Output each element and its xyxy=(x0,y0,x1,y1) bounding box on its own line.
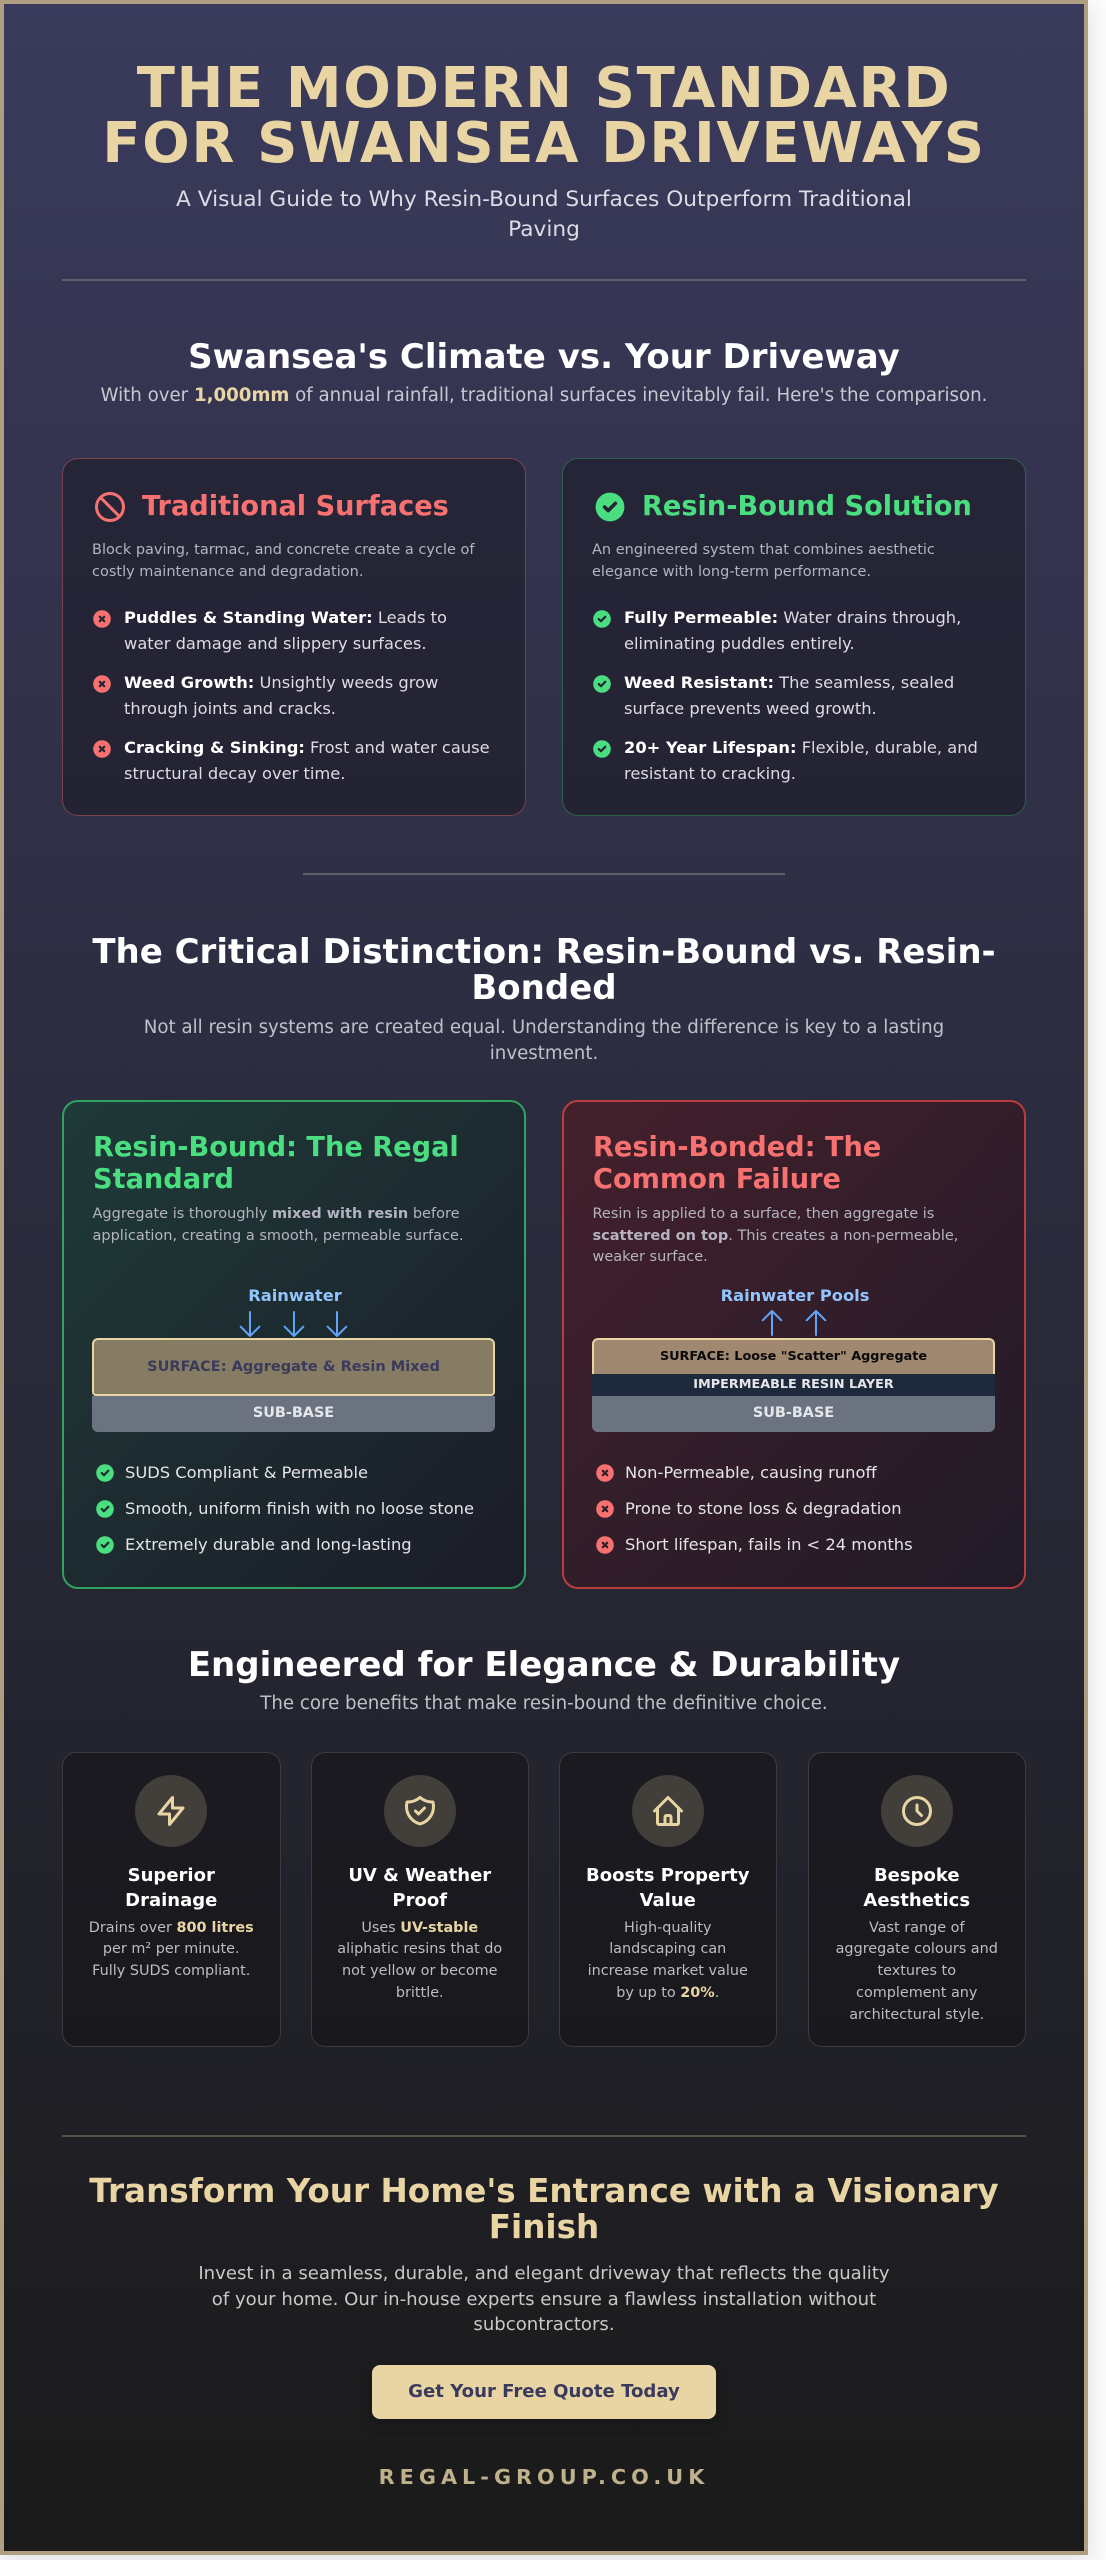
benefit card: drainage xyxy=(62,1752,280,2047)
list item xyxy=(624,608,961,653)
benefit text: brittle. xyxy=(396,1985,444,2001)
distinction intro text xyxy=(144,1016,944,1064)
list item: Fully Permeable: Water drains through, xyxy=(624,608,961,627)
list item xyxy=(124,608,447,653)
arrows: rain down xyxy=(240,1311,348,1337)
icon: check xyxy=(596,492,624,522)
benefit text xyxy=(337,1920,502,2001)
title: THE MODERN STANDARD xyxy=(137,56,951,121)
benefit title: Drainage xyxy=(125,1890,217,1911)
panel description: weaker surface. xyxy=(592,1249,708,1265)
call to action text: of your home. Our in-house experts ensure a flawless installation without xyxy=(212,2289,876,2310)
list item: Cracking & Sinking: Frost and water cause xyxy=(124,738,490,757)
heading: benefits: Engineered for Elegance & Durability xyxy=(188,1645,900,1685)
icon: check xyxy=(96,1464,114,1482)
subtitle xyxy=(176,187,912,242)
icon: check xyxy=(593,610,611,628)
layer: loose aggregate xyxy=(592,1338,995,1374)
benefit text: architectural style. xyxy=(849,2007,984,2023)
benefit title: Boosts Property xyxy=(586,1865,750,1886)
benefit title xyxy=(348,1865,492,1911)
layer: surface: SURFACE: Aggregate & Resin Mixed xyxy=(147,1358,440,1375)
layer: surface xyxy=(92,1338,495,1396)
call to action text xyxy=(0,2261,1088,2338)
panel description xyxy=(592,542,935,580)
icon: check xyxy=(96,1500,114,1518)
layer: sub-base xyxy=(92,1396,495,1432)
panel heading xyxy=(593,1132,881,1195)
list item: Short lifespan, fails in < 24 months xyxy=(625,1535,913,1554)
distinction intro text: investment. xyxy=(490,1042,598,1064)
button: free quote: Get Your Free Quote Today xyxy=(408,2381,680,2402)
list item: 20+ Year Lifespan: Flexible, durable, and xyxy=(624,738,978,757)
benefit text: textures to xyxy=(878,1963,956,1979)
rainwater label: Rainwater xyxy=(248,1286,342,1305)
benefit text: aggregate colours and xyxy=(836,1941,998,1957)
panel heading xyxy=(93,1132,459,1195)
panel description xyxy=(92,1206,464,1244)
climate intro text: With over 1,000mm of annual rainfall, traditional surfaces inevitably fail. Here's the comparison. xyxy=(101,385,987,406)
website: REGAL-GROUP.CO.UK xyxy=(379,2465,709,2489)
benefit text: per m² per minute. xyxy=(103,1941,240,1957)
panel heading: Standard xyxy=(93,1164,234,1195)
call to action heading: Transform Your Home's Entrance with a Visionary xyxy=(89,2172,999,2210)
button: free quote xyxy=(372,2365,716,2419)
benefits intro text: The core benefits that make resin-bound the definitive choice. xyxy=(260,1693,828,1714)
list item: surface prevents weed growth. xyxy=(624,699,877,718)
list item: structural decay over time. xyxy=(124,764,345,783)
heading: climate: Swansea's Climate vs. Your Driveway xyxy=(188,337,900,377)
panel description: An engineered system that combines aesthetic xyxy=(592,542,935,558)
list item: Weed Growth: Unsightly weeds grow xyxy=(124,673,438,692)
call to action text: subcontractors. xyxy=(473,2314,615,2335)
panel heading: Traditional Surfaces xyxy=(142,491,449,522)
layer: impermeable resin: IMPERMEABLE RESIN LAYER xyxy=(693,1377,894,1392)
list item: Extremely durable and long-lasting xyxy=(125,1535,412,1554)
icon: check xyxy=(593,675,611,693)
icon: ban xyxy=(95,492,125,522)
title xyxy=(102,56,986,176)
list item xyxy=(124,738,490,783)
benefit text: Vast range of xyxy=(869,1920,965,1936)
icon: x xyxy=(596,1536,614,1554)
benefit text: Uses UV-stable xyxy=(361,1920,478,1936)
list item xyxy=(124,673,438,718)
icon: check xyxy=(593,740,611,758)
benefit card: aesthetics xyxy=(808,1752,1026,2047)
heading: critical distinction: The Critical Distinction: Resin-Bound vs. Resin- xyxy=(92,932,996,972)
panel description: application, creating a smooth, permeable surface. xyxy=(92,1228,464,1244)
icon: bolt xyxy=(135,1775,207,1847)
panel: resin-bonded xyxy=(562,1100,1026,1589)
layer: loose aggregate: SURFACE: Loose "Scatter" Aggregate xyxy=(660,1349,927,1364)
panel heading: Resin-Bound Solution xyxy=(642,491,972,522)
list item: Prone to stone loss & degradation xyxy=(625,1499,902,1518)
list item: eliminating puddles entirely. xyxy=(624,634,855,653)
rainwater label: Rainwater Pools xyxy=(721,1286,869,1305)
panel description: Aggregate is thoroughly mixed with resin before xyxy=(92,1206,460,1222)
benefit title: Value xyxy=(640,1890,696,1911)
benefit card: value xyxy=(558,1752,777,2047)
layer: sub-base: SUB-BASE xyxy=(753,1405,834,1421)
benefit text xyxy=(560,1918,776,2005)
list item: Puddles & Standing Water: Leads to xyxy=(124,608,447,627)
icon: x xyxy=(596,1500,614,1518)
subtitle: A Visual Guide to Why Resin-Bound Surfaces Outperform Traditional xyxy=(176,187,912,212)
list item: through joints and cracks. xyxy=(124,699,336,718)
layer: sub-base: SUB-BASE xyxy=(253,1405,334,1421)
panel description: scattered on top. This creates a non-permeable, xyxy=(592,1228,958,1244)
benefit text: complement any xyxy=(856,1985,977,2001)
subtitle: Paving xyxy=(508,217,580,242)
benefit title: UV & Weather xyxy=(348,1865,491,1886)
panel description: elegance with long-term performance. xyxy=(592,564,871,580)
benefit title xyxy=(125,1865,217,1911)
benefit text: not yellow or become xyxy=(342,1963,498,1979)
benefit text: by up to 20%. xyxy=(616,1985,719,2001)
list item: Non-Permeable, causing runoff xyxy=(625,1463,877,1482)
list item: Smooth, uniform finish with no loose stone xyxy=(125,1499,474,1518)
panel description xyxy=(592,1206,958,1265)
benefit text: aliphatic resins that do xyxy=(337,1941,502,1957)
icon: x xyxy=(93,610,111,628)
icon: check xyxy=(96,1536,114,1554)
layer: impermeable resin xyxy=(592,1374,995,1396)
benefit text xyxy=(89,1920,254,1979)
list item xyxy=(624,738,978,783)
panel heading: Resin-Bonded: The xyxy=(593,1132,881,1163)
arrows: rain pooling up xyxy=(762,1310,826,1336)
call to action heading xyxy=(0,2173,1088,2245)
call to action heading: Finish xyxy=(489,2208,599,2246)
benefit title: Proof xyxy=(392,1890,447,1911)
benefit text: High-quality xyxy=(624,1920,712,1936)
panel heading: Resin-Bound: The Regal xyxy=(93,1132,459,1163)
benefit text: increase market value xyxy=(588,1963,748,1979)
benefit text: landscaping can xyxy=(609,1941,726,1957)
icon: x xyxy=(93,675,111,693)
benefit title: Superior xyxy=(128,1865,215,1886)
list item: water damage and slippery surfaces. xyxy=(124,634,427,653)
distinction intro text: Not all resin systems are created equal. Understanding the difference is key to a lasting xyxy=(144,1016,944,1038)
benefit title xyxy=(586,1865,750,1911)
list item: Weed Resistant: The seamless, sealed xyxy=(624,673,954,692)
panel heading: Common Failure xyxy=(593,1164,841,1195)
list item xyxy=(624,673,954,718)
benefit title: Bespoke xyxy=(874,1865,960,1886)
call to action text: Invest in a seamless, durable, and elegant driveway that reflects the quality xyxy=(198,2263,890,2284)
benefit title xyxy=(808,1863,1025,1913)
icon: shield xyxy=(384,1775,456,1847)
icon: clock xyxy=(881,1775,953,1847)
benefit text: Fully SUDS compliant. xyxy=(92,1963,250,1979)
feature list xyxy=(96,1463,474,1554)
icon: house xyxy=(632,1775,704,1847)
panel: resin-bound solution xyxy=(562,458,1026,816)
panel description: Resin is applied to a surface, then aggregate is xyxy=(592,1206,934,1222)
panel description: costly maintenance and degradation. xyxy=(92,564,363,580)
heading: critical distinction: Bonded xyxy=(471,968,617,1008)
icon: x xyxy=(596,1464,614,1482)
benefit card: uv xyxy=(310,1752,529,2047)
heading: critical distinction xyxy=(92,932,996,1008)
benefit text: Drains over 800 litres xyxy=(89,1920,254,1936)
benefit title: Aesthetics xyxy=(863,1890,970,1911)
icon: x xyxy=(93,740,111,758)
title: FOR SWANSEA DRIVEWAYS xyxy=(102,111,986,176)
list item: resistant to cracking. xyxy=(624,764,796,783)
list item: SUDS Compliant & Permeable xyxy=(125,1463,368,1482)
layer: sub-base xyxy=(592,1396,995,1432)
drawback list xyxy=(596,1463,913,1554)
benefit text xyxy=(808,1918,1025,2026)
panel description xyxy=(92,542,475,580)
panel: traditional surfaces xyxy=(62,458,526,816)
panel description: Block paving, tarmac, and concrete create a cycle of xyxy=(92,542,474,558)
panel: resin-bound xyxy=(62,1100,526,1589)
